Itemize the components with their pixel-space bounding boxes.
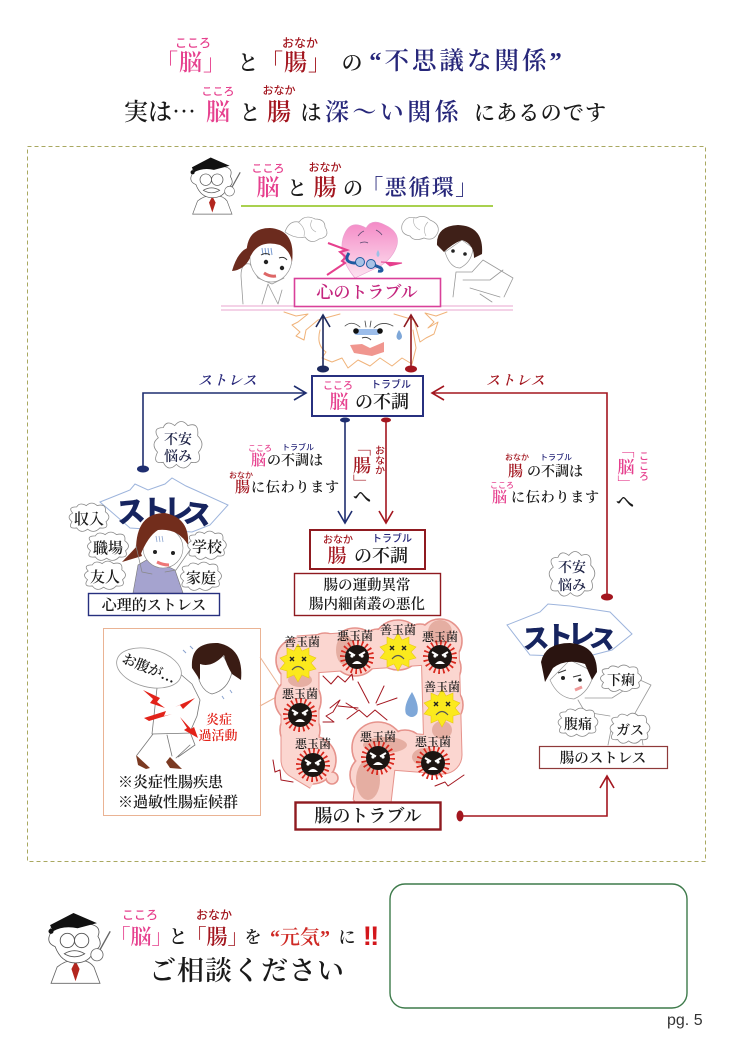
illustration: big stress right: ト — [546, 622, 573, 652]
title: 「脳」 — [155, 50, 227, 75]
illustration: big stress left: ス — [181, 497, 213, 532]
bacteria: good and bad: 善玉菌 — [424, 679, 460, 694]
title: こころ — [175, 36, 211, 50]
arrow: stress from gut side — [432, 374, 613, 600]
pink double rule — [221, 306, 513, 310]
call to action: おなか — [196, 908, 232, 922]
bacteria: good and bad: 善玉菌 — [284, 634, 320, 649]
cloud tags: gut symptoms: 腹痛 — [564, 716, 592, 733]
illustration: big stress right — [507, 604, 632, 657]
cloud tags: stress causes: 収入 — [74, 511, 104, 528]
call to action: に — [338, 928, 356, 947]
title: 「腸」 — [260, 50, 332, 75]
arrow: brain to gut red — [379, 418, 393, 523]
title: “不思議な関係” — [369, 47, 565, 75]
heading: vicious cycle — [252, 161, 479, 200]
call to action: 「腸」 — [186, 925, 248, 949]
subtitle: 深〜い関係 — [325, 99, 462, 126]
title: おなか — [282, 36, 318, 50]
label box: brain disorder: トラブル — [371, 378, 411, 391]
text: gut disorder reaches brain: に伝わります — [511, 490, 600, 506]
icon: professor pointing — [191, 158, 240, 214]
cloud tags: stress causes: 家庭 — [186, 569, 216, 587]
arrow: stress from gut side: ストレス — [486, 374, 546, 389]
arrow: stress from psychological side — [137, 374, 306, 472]
text: gut disorder reaches brain: こころ — [490, 481, 514, 490]
illustration: big stress left: ス — [115, 496, 147, 530]
call to action: と — [168, 927, 188, 948]
pain zigzags and drop — [273, 674, 464, 786]
cloud tags: gut symptoms — [558, 665, 650, 743]
heading: vicious cycle: こころ — [252, 162, 284, 175]
page number: pg. 5 — [667, 1012, 703, 1029]
heading underline — [241, 205, 493, 207]
text: brain disorder reaches gut: 脳 — [251, 452, 266, 469]
label box: gut stress — [540, 746, 668, 768]
label box: psychological stress — [88, 594, 220, 616]
subtitle: おなか — [262, 84, 296, 97]
text: brain disorder reaches gut: おなか — [229, 471, 253, 480]
vertical label: to the gut: へ — [353, 487, 371, 507]
cloud tags: stress causes: 友人 — [90, 568, 120, 586]
text: gut disorder reaches brain — [490, 452, 600, 506]
label box: gut disorder: トラブル — [372, 532, 412, 545]
subtitle: 実は… — [124, 92, 196, 127]
label box: brain disorder: の不調 — [355, 392, 409, 412]
cloud tags: stress causes: 学校 — [192, 538, 223, 556]
label box: gut stress: 腸のストレス — [560, 750, 646, 767]
subtitle: と — [240, 101, 260, 125]
red label: 炎症 — [206, 712, 232, 727]
cloud tags: stress causes: 職場 — [93, 540, 123, 557]
text: gut disorder reaches brain: 腸 — [508, 463, 523, 480]
bacteria: good and bad: 悪玉菌 — [415, 734, 451, 749]
text: brain disorder reaches gut: こころ — [248, 444, 272, 453]
text: gut disorder reaches brain: の不調は — [527, 464, 583, 480]
illustration: worried woman with brain — [232, 217, 327, 304]
heading: vicious cycle: の — [343, 178, 363, 200]
call to action: を — [244, 928, 262, 947]
panel: vicious cycle frame — [28, 146, 706, 862]
callout: inflammation panel: 過活動 — [198, 728, 238, 743]
text: gut disorder reaches brain: おなか — [505, 453, 529, 462]
illustration: intestine — [275, 619, 463, 818]
call to action: ご相談ください — [149, 956, 345, 986]
cloud: anxiety left — [154, 422, 202, 468]
call to action: こころ — [122, 908, 158, 922]
text: brain disorder reaches gut — [229, 442, 340, 496]
vertical label: to the brain — [614, 441, 648, 512]
bacteria: good and bad: 善玉菌 — [380, 622, 416, 637]
illustration: big stress left: ト — [141, 496, 170, 528]
label box: gut symptoms: 腸内細菌叢の悪化 — [309, 595, 425, 613]
illustration: big stress left — [100, 478, 228, 532]
text: brain disorder reaches gut: の不調は — [267, 453, 323, 469]
cloud tags: gut symptoms: ガス — [616, 723, 644, 739]
cloud: anxiety left: 不安 — [164, 431, 192, 448]
label box: gut disorder — [310, 530, 425, 569]
cloud tags: gut symptoms: 下痢 — [607, 673, 635, 689]
illustration: man holding stomach with brain — [402, 216, 513, 302]
vertical label: to the brain: 「脳」 — [614, 441, 634, 492]
heading: vicious cycle: おなか — [308, 161, 342, 174]
label box: gut symptoms: 腸の運動異常 — [324, 576, 410, 594]
speech bubble — [112, 642, 186, 694]
arrow: brain to gut navy — [338, 418, 352, 523]
illustration: big stress right: ス — [588, 622, 618, 656]
arrow: gut trouble to gut stress — [456, 776, 614, 822]
cloud tags: stress causes — [69, 503, 226, 590]
text: gut disorder reaches brain: トラブル — [540, 452, 572, 462]
bacteria: good and bad: 悪玉菌 — [337, 628, 373, 643]
label box: brain disorder: こころ — [323, 380, 353, 392]
call to action — [110, 908, 379, 986]
disease notes: ※炎症性腸疾患 — [118, 773, 224, 791]
bacteria: good and bad: 悪玉菌 — [422, 629, 458, 644]
heading: vicious cycle: 腸 — [314, 175, 336, 200]
label box: gut symptoms — [294, 574, 440, 616]
call to action: “元気” — [270, 926, 330, 949]
heading: vicious cycle: 「悪循環」 — [361, 175, 479, 200]
illustration: sad heart — [327, 222, 402, 278]
illustration: big stress left: レ — [164, 495, 193, 527]
title: の — [342, 51, 362, 75]
label box: heart trouble: 心のトラブル — [316, 283, 418, 302]
label box: gut trouble — [296, 802, 440, 830]
illustration: worried woman left — [122, 513, 190, 593]
subtitle: は — [300, 101, 322, 125]
cloud: anxiety right: 不安 — [558, 559, 586, 576]
cloud: anxiety right: 悩み — [558, 577, 586, 594]
label box: gut disorder: の不調 — [354, 546, 408, 566]
label box: brain disorder — [312, 376, 423, 416]
title — [155, 36, 565, 75]
arrow: brain to heart red — [404, 315, 418, 372]
vertical label: to the brain: こころ — [636, 451, 648, 482]
illustration: distressed brain face — [284, 312, 447, 368]
heading: vicious cycle: 脳 — [256, 175, 280, 200]
label box: brain disorder: 脳 — [329, 391, 349, 413]
vertical label: to the gut: おなか — [372, 445, 384, 475]
label box: gut disorder: おなか — [323, 534, 353, 546]
subtitle: こころ — [202, 85, 234, 98]
title: と — [238, 51, 258, 75]
bacteria: good and bad: 悪玉菌 — [360, 729, 396, 744]
callout: inflammation panel — [104, 628, 282, 816]
subtitle: にあるのです — [474, 101, 607, 125]
call to action: 「脳」 — [110, 925, 172, 949]
subtitle: 脳 — [206, 99, 230, 126]
cloud: anxiety left: 悩み — [164, 448, 192, 465]
woman clutching stomach — [136, 643, 241, 769]
subtitle: 腸 — [267, 99, 291, 126]
arrow: brain to heart navy — [316, 315, 330, 372]
illustration: big stress right: ス — [521, 623, 550, 655]
vertical label: to the brain: へ — [616, 492, 634, 512]
icon: professor bottom — [48, 913, 110, 983]
bacteria: good and bad: 悪玉菌 — [282, 686, 318, 701]
vertical label: to the gut — [351, 438, 384, 507]
text: gut disorder reaches brain: 脳 — [492, 489, 507, 506]
stamp box — [390, 884, 687, 1008]
call to action: ‼ — [363, 921, 379, 951]
bacteria: good and bad: 悪玉菌 — [295, 736, 331, 751]
text: brain disorder reaches gut: に伝わります — [251, 480, 340, 496]
label box: gut disorder: 腸 — [327, 545, 347, 567]
text: brain disorder reaches gut: トラブル — [282, 442, 314, 452]
label box: gut trouble: 腸のトラブル — [314, 806, 422, 826]
illustration: big stress right: レ — [568, 620, 595, 650]
text: brain disorder reaches gut: 腸 — [235, 479, 250, 496]
label box: heart trouble — [294, 278, 440, 306]
cloud: anxiety right — [549, 551, 595, 596]
subtitle — [124, 84, 607, 127]
inflammation bolts — [143, 690, 198, 738]
vertical label: to the gut: 「腸」 — [351, 438, 371, 492]
label box: psychological stress: 心理的ストレス — [102, 597, 206, 614]
callout: inflammation panel: ※過敏性腸症候群 — [118, 793, 238, 811]
arrow: stress from psychological side: ストレス — [198, 374, 258, 389]
speech bubble: お腹が… — [120, 650, 178, 687]
illustration: man with stomach ache right — [541, 643, 651, 745]
heading: vicious cycle: と — [287, 178, 307, 200]
bacteria: good and bad — [280, 622, 460, 779]
